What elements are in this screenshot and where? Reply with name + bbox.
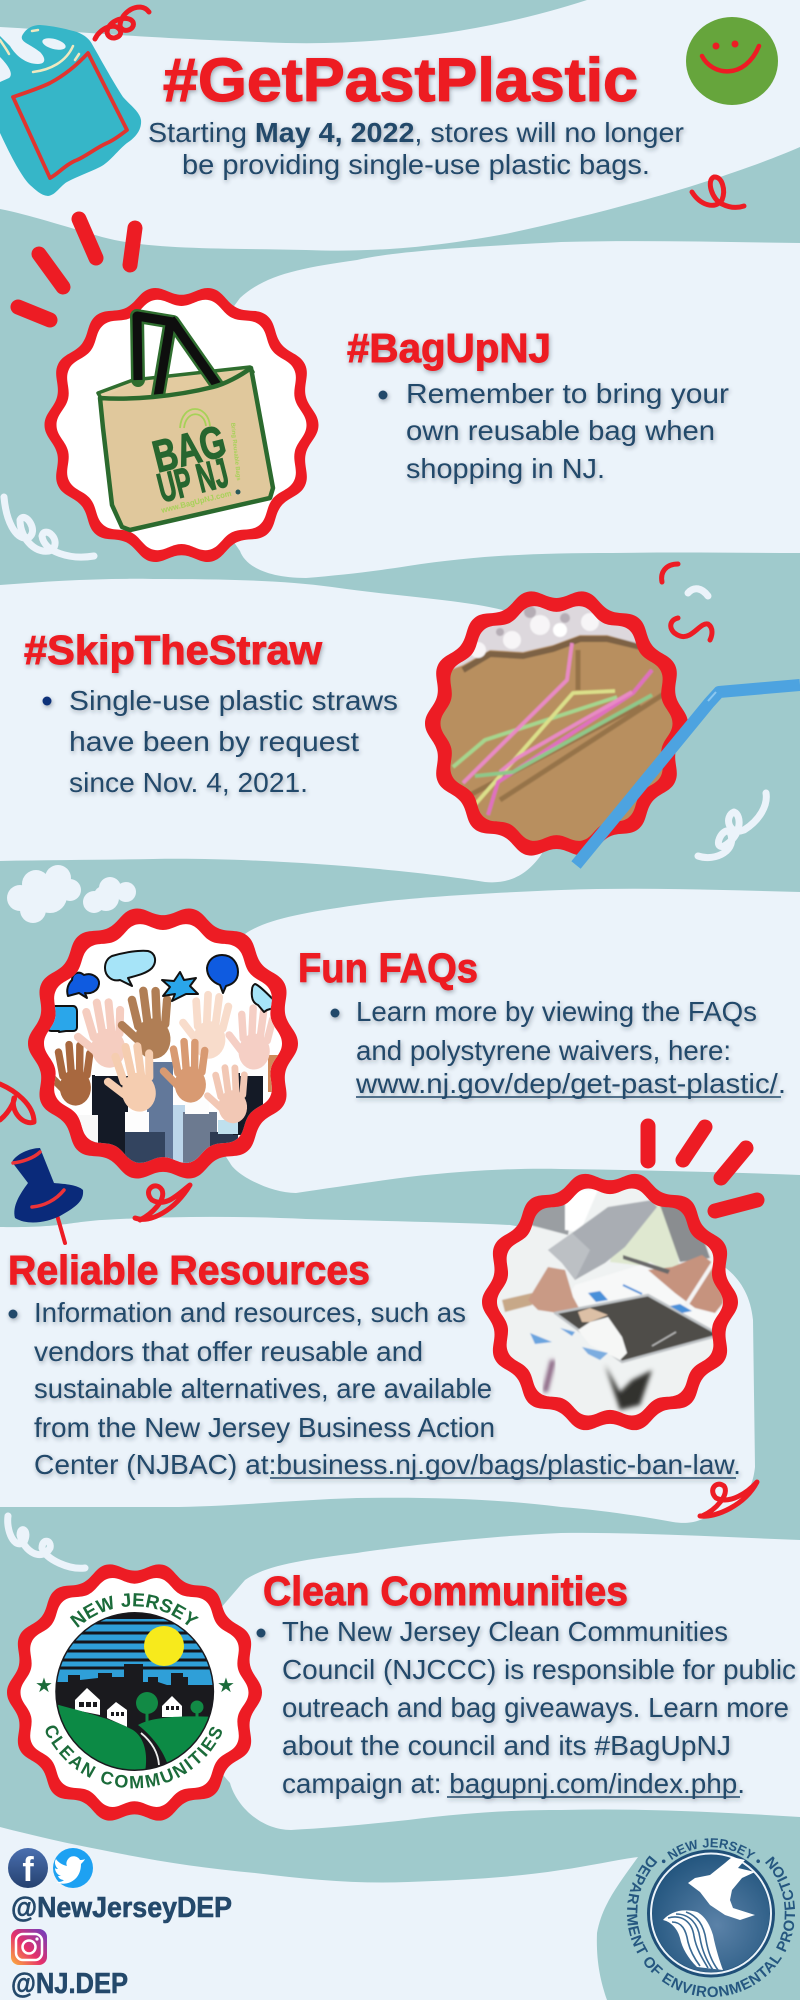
logo: NJ Clean Communities: CLEAN COMMUNITIES xyxy=(46,1726,222,1788)
text: Clean Communities: campaign at: bagupnj.com/index.php. xyxy=(282,1768,745,1799)
burst: resources xyxy=(648,1126,757,1211)
heading: Fun FAQs: Fun FAQs xyxy=(298,945,478,991)
text: BagUpNJ: Remember to bring your xyxy=(406,378,729,409)
photo: reusable bag: UP NJ xyxy=(153,449,233,511)
title: #GetPastPlastic xyxy=(163,46,638,114)
photo: reusable bag: BAG xyxy=(148,415,231,482)
photo: raised hands xyxy=(28,908,298,1179)
text: Fun FAQs: Learn more by viewing the FAQs xyxy=(356,996,757,1027)
text: Reliable Resources: Center (NJBAC) at:business.nj.gov/bags/plastic-ban-law. xyxy=(34,1449,741,1480)
subtitle: be providing single-use plastic bags. xyxy=(182,149,650,180)
panel: footer xyxy=(0,1827,638,2000)
text: BagUpNJ: own reusable bag when xyxy=(406,415,715,446)
panel: Clean Communities xyxy=(150,1533,800,1830)
photo: reusable bag: Bring Reusable Bags xyxy=(229,423,241,482)
squiggle: white loop right xyxy=(698,793,766,858)
icon: instagram xyxy=(11,1929,47,1965)
photo: straws on beach xyxy=(425,590,690,860)
text: Clean Communities: Council (NJCCC) is responsible for public xyxy=(282,1654,796,1685)
icon: blue straw xyxy=(576,685,800,865)
icon: twitter xyxy=(53,1848,93,1888)
squiggle: right xyxy=(692,177,744,207)
photo: reusable bag xyxy=(44,288,318,562)
icon: pushpin xyxy=(12,1148,83,1243)
squiggle: top xyxy=(95,7,149,39)
photo: reusable bag: www.BagUpNJ.com xyxy=(159,489,232,515)
text: Reliable Resources: vendors that offer reusable and xyxy=(34,1336,423,1367)
logo: NJ DEP seal: • NEW JERSEY • xyxy=(662,1838,760,1864)
text: SkipTheStraw: have been by request xyxy=(69,726,359,757)
text: Clean Communities: about the council and its #BagUpNJ xyxy=(282,1730,731,1761)
text: BagUpNJ: shopping in NJ. xyxy=(406,453,605,484)
squiggle: white loop left xyxy=(4,497,94,557)
squiggles: straw top right xyxy=(662,564,712,640)
heading: Clean Communities: Clean Communities xyxy=(263,1568,628,1614)
text: Fun FAQs: www.nj.gov/dep/get-past-plastic/. xyxy=(355,1068,786,1099)
panel: BagUpNJ xyxy=(150,241,800,578)
clouds xyxy=(7,865,136,923)
text: Reliable Resources: Information and resources, such as xyxy=(34,1297,466,1328)
panel: header xyxy=(0,0,800,251)
text: Reliable Resources: from the New Jersey Business Action xyxy=(34,1412,495,1443)
text: BagUpNJ xyxy=(378,378,729,484)
squiggle: under hands xyxy=(135,1185,190,1220)
logo: NJ Clean Communities xyxy=(7,1564,262,1821)
photo: tablet and hands xyxy=(480,1170,745,1435)
logo: NJ Clean Communities: NEW JERSEY xyxy=(70,1593,199,1628)
logo: NJ Clean Communities: ★ xyxy=(35,1675,53,1697)
icon: facebook xyxy=(8,1848,48,1889)
icon: facebook: f xyxy=(22,1851,34,1889)
heading: Reliable Resources: Reliable Resources xyxy=(8,1247,370,1293)
text: SkipTheStraw: Single-use plastic straws xyxy=(69,685,398,716)
text: Clean Communities: The New Jersey Clean Communities xyxy=(282,1616,728,1647)
text: SkipTheStraw xyxy=(42,685,398,798)
heading: BagUpNJ: #BagUpNJ xyxy=(347,325,551,371)
panel: SkipTheStraw xyxy=(0,579,600,882)
squiggle: white loop clean xyxy=(8,1516,85,1568)
heading: SkipTheStraw: #SkipTheStraw xyxy=(24,627,322,673)
text: Fun FAQs: and polystyrene waivers, here: xyxy=(356,1035,731,1066)
icon: smiley xyxy=(686,17,778,105)
handle: NewJerseyDEP: @NewJerseyDEP xyxy=(11,1892,232,1924)
burst: bag xyxy=(18,219,135,320)
text: Clean Communities xyxy=(256,1616,796,1799)
subtitle: Starting May 4, 2022, stores will no longer xyxy=(148,117,684,148)
subtitle xyxy=(148,117,684,180)
panel: Fun FAQs xyxy=(150,889,800,1193)
logo: NJ Clean Communities: ★ xyxy=(217,1675,235,1697)
text: Fun FAQs xyxy=(330,996,786,1099)
panel: Reliable Resources xyxy=(0,1217,755,1523)
squiggle: resources xyxy=(700,1482,757,1516)
squiggle: left xyxy=(0,1084,34,1123)
text: SkipTheStraw: since Nov. 4, 2021. xyxy=(69,767,308,798)
logo: NJ DEP seal: DEPARTMENT OF ENVIRONMENTAL PROTECTION xyxy=(626,1856,795,1998)
icon: plastic bag xyxy=(0,25,141,196)
handle: NJ.DEP: @NJ.DEP xyxy=(11,1968,128,2000)
text: Reliable Resources: sustainable alternatives, are available xyxy=(34,1373,492,1404)
text: Reliable Resources xyxy=(8,1297,741,1480)
text: Clean Communities: outreach and bag giveaways. Learn more xyxy=(282,1692,789,1723)
